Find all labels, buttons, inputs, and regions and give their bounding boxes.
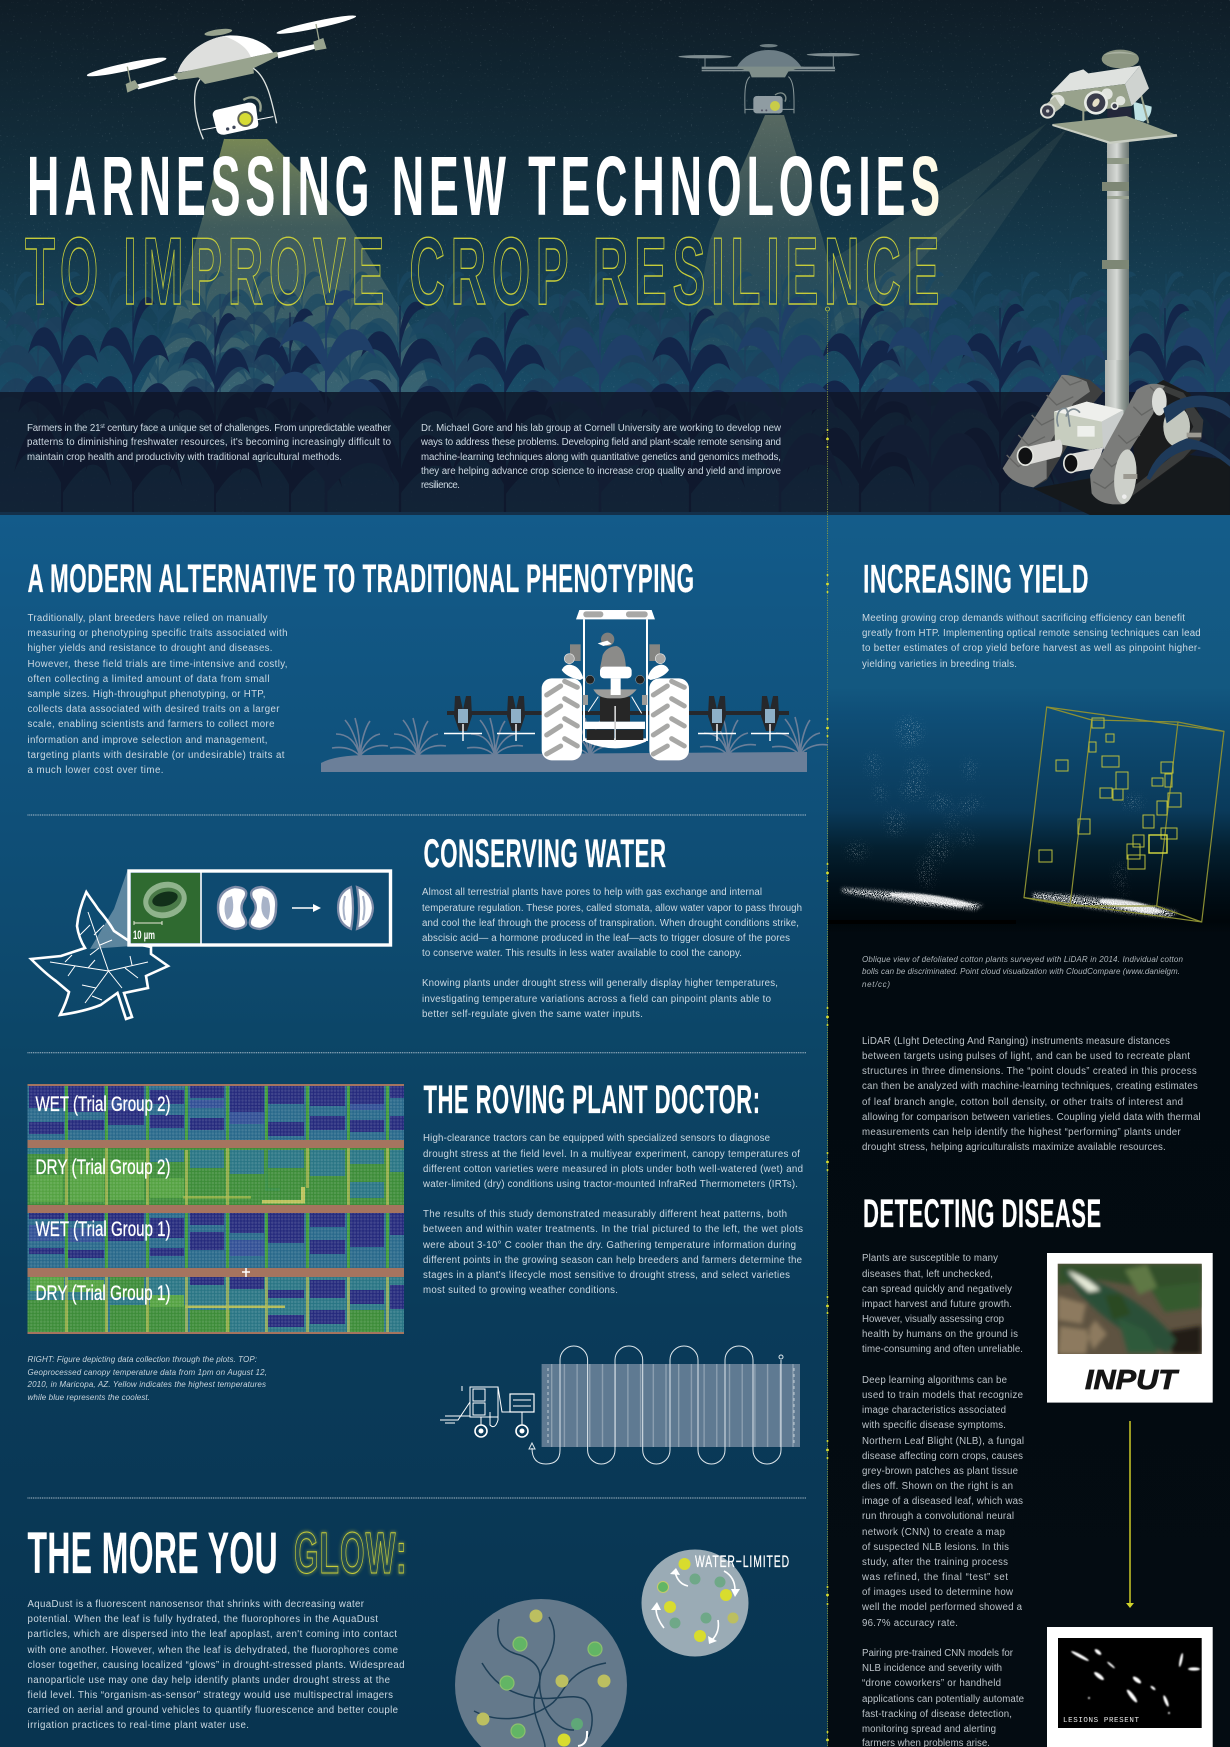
heatmap labels: DRY (Trial Group 1) (36, 1282, 170, 1305)
text: conserving water: better self-regulate given the same water inputs. (422, 1009, 643, 1020)
text: aquadust: irrigation practices to real-time plant water use. (28, 1720, 249, 1731)
text: roving plant doctor: water-limited (dry) conditions using tractor-mounted InfraRed Thermometers (IRTs). (422, 1179, 798, 1190)
text: detecting disease: applications can potentially automate (862, 1694, 1024, 1705)
text: roving plant doctor: High-clearance tractors can be equipped with specialized sensors to diagnose (423, 1133, 770, 1144)
text: aquadust: with one another. However, when the leaf is dehydrated, the fluorophores come (26, 1645, 398, 1656)
text: increasing yield (862, 613, 1201, 670)
heatmap labels: DRY (Trial Group 2) (36, 1156, 170, 1179)
title (25, 139, 945, 325)
icon: rover tracked base (1003, 360, 1230, 515)
text: detecting disease: 96.7% accuracy rate. (862, 1618, 958, 1629)
card: input photo (1047, 1253, 1213, 1403)
tractor body (542, 610, 689, 760)
text: detecting disease: with specific disease symptoms. (861, 1420, 1006, 1431)
glow word (294, 1521, 408, 1586)
stomata box (129, 871, 390, 945)
icon: large drone (86, 13, 357, 139)
text: LiDAR: allowing for comparison between varieties. Coupling yield data with thermal (862, 1112, 1201, 1123)
text: detecting disease: Pairing pre-trained CNN models for (862, 1648, 1014, 1659)
text: LiDAR: of leaf branch angle, cotton boll density, or other traits of interest and (862, 1097, 1183, 1108)
ground and plants (321, 717, 828, 772)
text: detecting disease: can spread quickly and negatively (862, 1284, 1012, 1295)
text: conserving water: investigating temperature variations across a field can pinpoint plants able to (422, 994, 771, 1005)
dry trial group 1 (28, 1277, 404, 1332)
implement bar (444, 696, 789, 741)
text: conserving water: abscisic acid— a hormone produced in the leaf—acts to trigger closure of the pores (422, 933, 790, 944)
intro text right: ways to address these problems. Developing field and plant-scale remote sensing and (420, 437, 781, 448)
text: conserving water: Knowing plants under drought stress will generally display higher temperatures, (422, 978, 778, 989)
text: LiDAR: can then be analyzed with machine-learning techniques, creating estimates (862, 1081, 1198, 1092)
right column background (828, 515, 1230, 1747)
text: detecting disease: Plants are susceptible to many (862, 1253, 998, 1264)
illustration: tractor path through field plots (440, 1346, 800, 1464)
text: modern alternative: Traditionally, plant breeders have relied on manually (28, 613, 268, 624)
intro text left: patterns to diminishing freshwater resources, it's becoming increasingly difficult to (27, 437, 391, 448)
wet trial group 1 (28, 1213, 404, 1268)
text: roving plant doctor: drought stress at the field level. In a multiyear experiment, canopy temperatures of (423, 1149, 800, 1160)
photo: lesion map (1058, 1638, 1202, 1728)
heading: modern alternative: A MODERN ALTERNATIVE TO TRADITIONAL PHENOTYPING (28, 557, 694, 601)
icon: leaf (31, 892, 168, 1019)
intro text right: Dr. Michael Gore and his lab group at Cornell University are working to develop new (421, 423, 782, 434)
dark intro band (0, 392, 1230, 515)
intro text left: Farmers in the 21 (27, 423, 100, 434)
text: roving plant doctor: The results of this study demonstrated measurably different heat patterns, both (423, 1209, 787, 1220)
text: roving plant doctor: between and within water treatments. In the trial pictured to the left, the wet plots (423, 1224, 803, 1235)
chart: LiDAR point clouds (828, 707, 1224, 924)
text: detecting disease: of suspected NLB lesions. In this (862, 1542, 1009, 1553)
caption: LiDAR: Oblique view of defoliated cotton plants surveyed with LiDAR in 2014. Individual cotton (862, 955, 1184, 964)
text: detecting disease: health by humans on the ground is (862, 1329, 1018, 1340)
vertical dotted timeline (826, 307, 830, 1747)
text: aquadust: AquaDust is a fluorescent nanosensor that shrinks with decreasing water (28, 1599, 365, 1610)
text: detecting disease: Deep learning algorithms can be (862, 1375, 1007, 1386)
text: LiDAR: measurements can help identify the highest “performing” plants under (862, 1127, 1181, 1138)
text: increasing yield: greatly from HTP. Implementing optical remote sensing techniques can lead (862, 628, 1201, 639)
text: detecting disease: Northern Leaf Blight (NLB), a fungal (862, 1436, 1024, 1447)
text: modern alternative: higher yields and resistance to drought and diseases. (28, 643, 272, 654)
text: detecting disease: of images used to determine how (862, 1587, 1014, 1598)
text: modern alternative: information and improve selection and management, (28, 735, 268, 746)
icon: rover sensor head (1040, 50, 1177, 420)
wet trial group 2 (28, 1086, 404, 1140)
illustration: tractor in field (321, 610, 828, 772)
caption: LiDAR (862, 955, 1184, 989)
text: detecting disease: well the model performed showed a (861, 1602, 1023, 1613)
text: detecting disease: was refined, the final “test” set (861, 1572, 1008, 1583)
text: detecting disease: dies off. Shown on the right is an (862, 1481, 1013, 1492)
caption: LiDAR: bolls can be discriminated. Point cloud visualization with CloudCompare (www.danielgm. (862, 967, 1180, 976)
text: modern alternative: scale, enabling scientists and farmers to collect more (28, 719, 274, 730)
label: lesions present: LESIONS PRESENT (1063, 1717, 1139, 1725)
text: aquadust: carried on aerial and ground vehicles to quantify fluorescence and better couple (28, 1705, 398, 1716)
caption: heatmap: Geoprocessed canopy temperature data from 1pm on August 12, (28, 1368, 267, 1377)
divider (28, 1497, 806, 1499)
text: roving plant doctor: different cotton varieties were measured in plots under both well-watered (wet) and (423, 1164, 803, 1175)
text: aquadust: nanoparticle use may one day help identify plants under drought stress at the (28, 1675, 390, 1686)
text: roving plant doctor: were about 3-10° C cooler than the dry. Gathering temperature information during (422, 1240, 796, 1251)
text: detecting disease: However, visually assessing crop (862, 1314, 1004, 1325)
heading: the more you glow: THE MORE YOU (28, 1521, 278, 1586)
text: conserving water: temperature regulation. These pores, called stomata, allow water vapor to pass through (422, 903, 802, 914)
caption: heatmap: while blue represents the coolest. (28, 1393, 150, 1402)
text: detecting disease: disease affecting corn crops, causes (862, 1451, 1023, 1462)
text: roving plant doctor (422, 1133, 803, 1296)
text: LiDAR: between targets using pulses of light, and can be used to recreate plant (862, 1051, 1190, 1062)
text: detecting disease: study, after the training process (862, 1557, 1008, 1568)
handwritten label: input: INPUT (1085, 1364, 1180, 1395)
divider (28, 814, 806, 816)
text: detecting disease: image characteristics associated (862, 1405, 1006, 1416)
intro text right (420, 423, 782, 491)
text: detecting disease: impact harvest and future growth. (862, 1299, 1012, 1310)
text: detecting disease: fast-tracking of disease detection, (862, 1709, 1012, 1720)
intro text left (27, 423, 392, 463)
text: roving plant doctor: stages in a plant's lifecycle most sensitive to drought stress, and select varieties (423, 1270, 790, 1281)
intro text right: machine-learning techniques along with quantitative genetics and genomics methods, (421, 452, 781, 463)
text: roving plant doctor: different points in the growing season can help breeders and farmers determine the (423, 1255, 802, 1266)
text: conserving water: Almost all terrestrial plants have pores to help with gas exchange and internal (422, 887, 762, 898)
text: modern alternative (28, 613, 288, 776)
dry trial group 2 (28, 1148, 404, 1205)
arrow: input to output (1126, 1421, 1134, 1608)
intro text left: maintain crop health and productivity with traditional agricultural methods. (27, 452, 342, 463)
drone light beams (140, 115, 1068, 400)
text: modern alternative: targeting plants with desirable (or undesirable) traits at (28, 750, 285, 761)
text: LiDAR: LiDAR (LIght Detecting And Ranging) instruments measure distances (862, 1036, 1170, 1047)
heatmap labels: WET (Trial Group 2) (36, 1093, 170, 1116)
caption: heatmap: 2010, in Maricopa, AZ. Yellow indicates the highest temperatures (26, 1380, 266, 1389)
text: modern alternative: a much lower cost over time. (28, 765, 164, 776)
heatmap labels: WET (Trial Group 1) (36, 1218, 170, 1241)
text: conserving water (422, 887, 802, 1020)
text: detecting disease: “drone coworkers” or handheld (862, 1678, 1001, 1689)
point cloud: cotton plant (828, 718, 1016, 924)
text: conserving water: to conserve water. This results in less water available to cool the canopy. (422, 948, 742, 959)
text: modern alternative: often collecting a limited amount of data from small (28, 674, 270, 685)
text: modern alternative: measuring or phenotyping specific traits associated with (28, 628, 288, 639)
text: detecting disease: diseases that, left unchecked, (862, 1269, 993, 1280)
intro text left: st (100, 424, 105, 430)
text: detecting disease: network (CNN) to create a map (862, 1527, 1005, 1538)
text: modern alternative: However, these field trials are time-intensive and costly, (28, 659, 288, 670)
text: LiDAR: structures in three dimensions. The “point clouds” created in this process (862, 1066, 1197, 1077)
divider (28, 1052, 806, 1054)
glow word: GLOW: (294, 1521, 408, 1586)
text: detecting disease: NLB incidence and severity with (862, 1663, 1002, 1674)
text: modern alternative: collects data associated with desired traits on a larger (28, 704, 280, 715)
label: water-limited: WATER−LIMITED (695, 1552, 790, 1571)
text: LiDAR (862, 1036, 1201, 1153)
plot stripes (65, 1086, 389, 1268)
heading: conserving water: CONSERVING WATER (424, 832, 666, 876)
caption: heatmap: RIGHT: Figure depicting data collection through the plots. TOP: (28, 1355, 257, 1364)
intro text left: century face a unique set of challenges. From unpredictable weather (105, 423, 392, 434)
text: increasing yield: to better estimates of crop yield before harvest as well as pinpoint higher- (862, 643, 1201, 654)
text: aquadust: particles, which are dispersed into the leaf apoplast, aren't coming into contact (28, 1629, 397, 1640)
text: LiDAR: drought stress, helping agriculturalists maximize available resources. (862, 1142, 1166, 1153)
text: modern alternative: sample sizes. High-throughput phenotyping, or HTP, (28, 689, 266, 700)
text: aquadust: potential. When the leaf is fully hydrated, the fluorophores in the AquaDust (28, 1614, 378, 1625)
glow word: GLOW: (294, 1521, 408, 1586)
text: detecting disease (861, 1253, 1024, 1747)
text: aquadust: closer together, causing localized “glows” in drought-stressed plants. Widespread (28, 1660, 404, 1671)
card: output lesion map (1047, 1627, 1213, 1747)
intro text right: resilience. (421, 480, 460, 491)
text: detecting disease: image of a diseased leaf, which was (862, 1496, 1023, 1507)
corn field (0, 271, 1230, 515)
text: aquadust (26, 1599, 404, 1731)
text: detecting disease: time-consuming and often unreliable. (862, 1344, 1023, 1355)
icon: high-clearance tractor (440, 1386, 534, 1437)
diagram: hydrated leaf circle (455, 1599, 627, 1747)
hero background (0, 0, 1230, 515)
text: detecting disease: used to train models that recognize (862, 1390, 1023, 1401)
diagram: water-limited leaf circle (642, 1550, 790, 1656)
text: increasing yield: Meeting growing crop demands without sacrificing efficiency can benefit (862, 613, 1185, 624)
left column background (0, 515, 828, 1747)
text: roving plant doctor: most suited to growing weather conditions. (423, 1285, 618, 1296)
text: aquadust: field level. This “organism-as-sensor” strategy would use multispectral imagers (28, 1690, 393, 1701)
caption: heatmap (26, 1355, 267, 1402)
icon: leaf with magnified stomata: 10 µm (133, 928, 155, 942)
photo: diseased corn leaf (1058, 1264, 1202, 1354)
text: detecting disease: monitoring spread and alerting (862, 1724, 996, 1735)
heatmap labels (36, 1093, 170, 1305)
text: detecting disease: grey-brown patches as plant tissue (862, 1466, 1018, 1477)
text: conserving water: and cool the leaf through the process of transpiration. When drought conditions strike, (422, 918, 799, 929)
caption: LiDAR: net/cc) (862, 980, 890, 989)
chart: canopy temperature heatmap (28, 1084, 404, 1334)
intro text right: they are helping advance crop science to increase crop quality and yield and improve (421, 466, 781, 477)
text: detecting disease: run through a convolutional neural (862, 1511, 1014, 1522)
icon: distant drone (678, 44, 860, 113)
stomata open and closed (218, 887, 373, 929)
text: increasing yield: yielding varieties in breeding trials. (862, 659, 1017, 670)
heading: roving plant doctor: THE ROVING PLANT DOCTOR: (424, 1078, 760, 1122)
point cloud: boll detection boxes (1024, 707, 1224, 922)
icon: leaf with magnified stomata (31, 870, 390, 1019)
